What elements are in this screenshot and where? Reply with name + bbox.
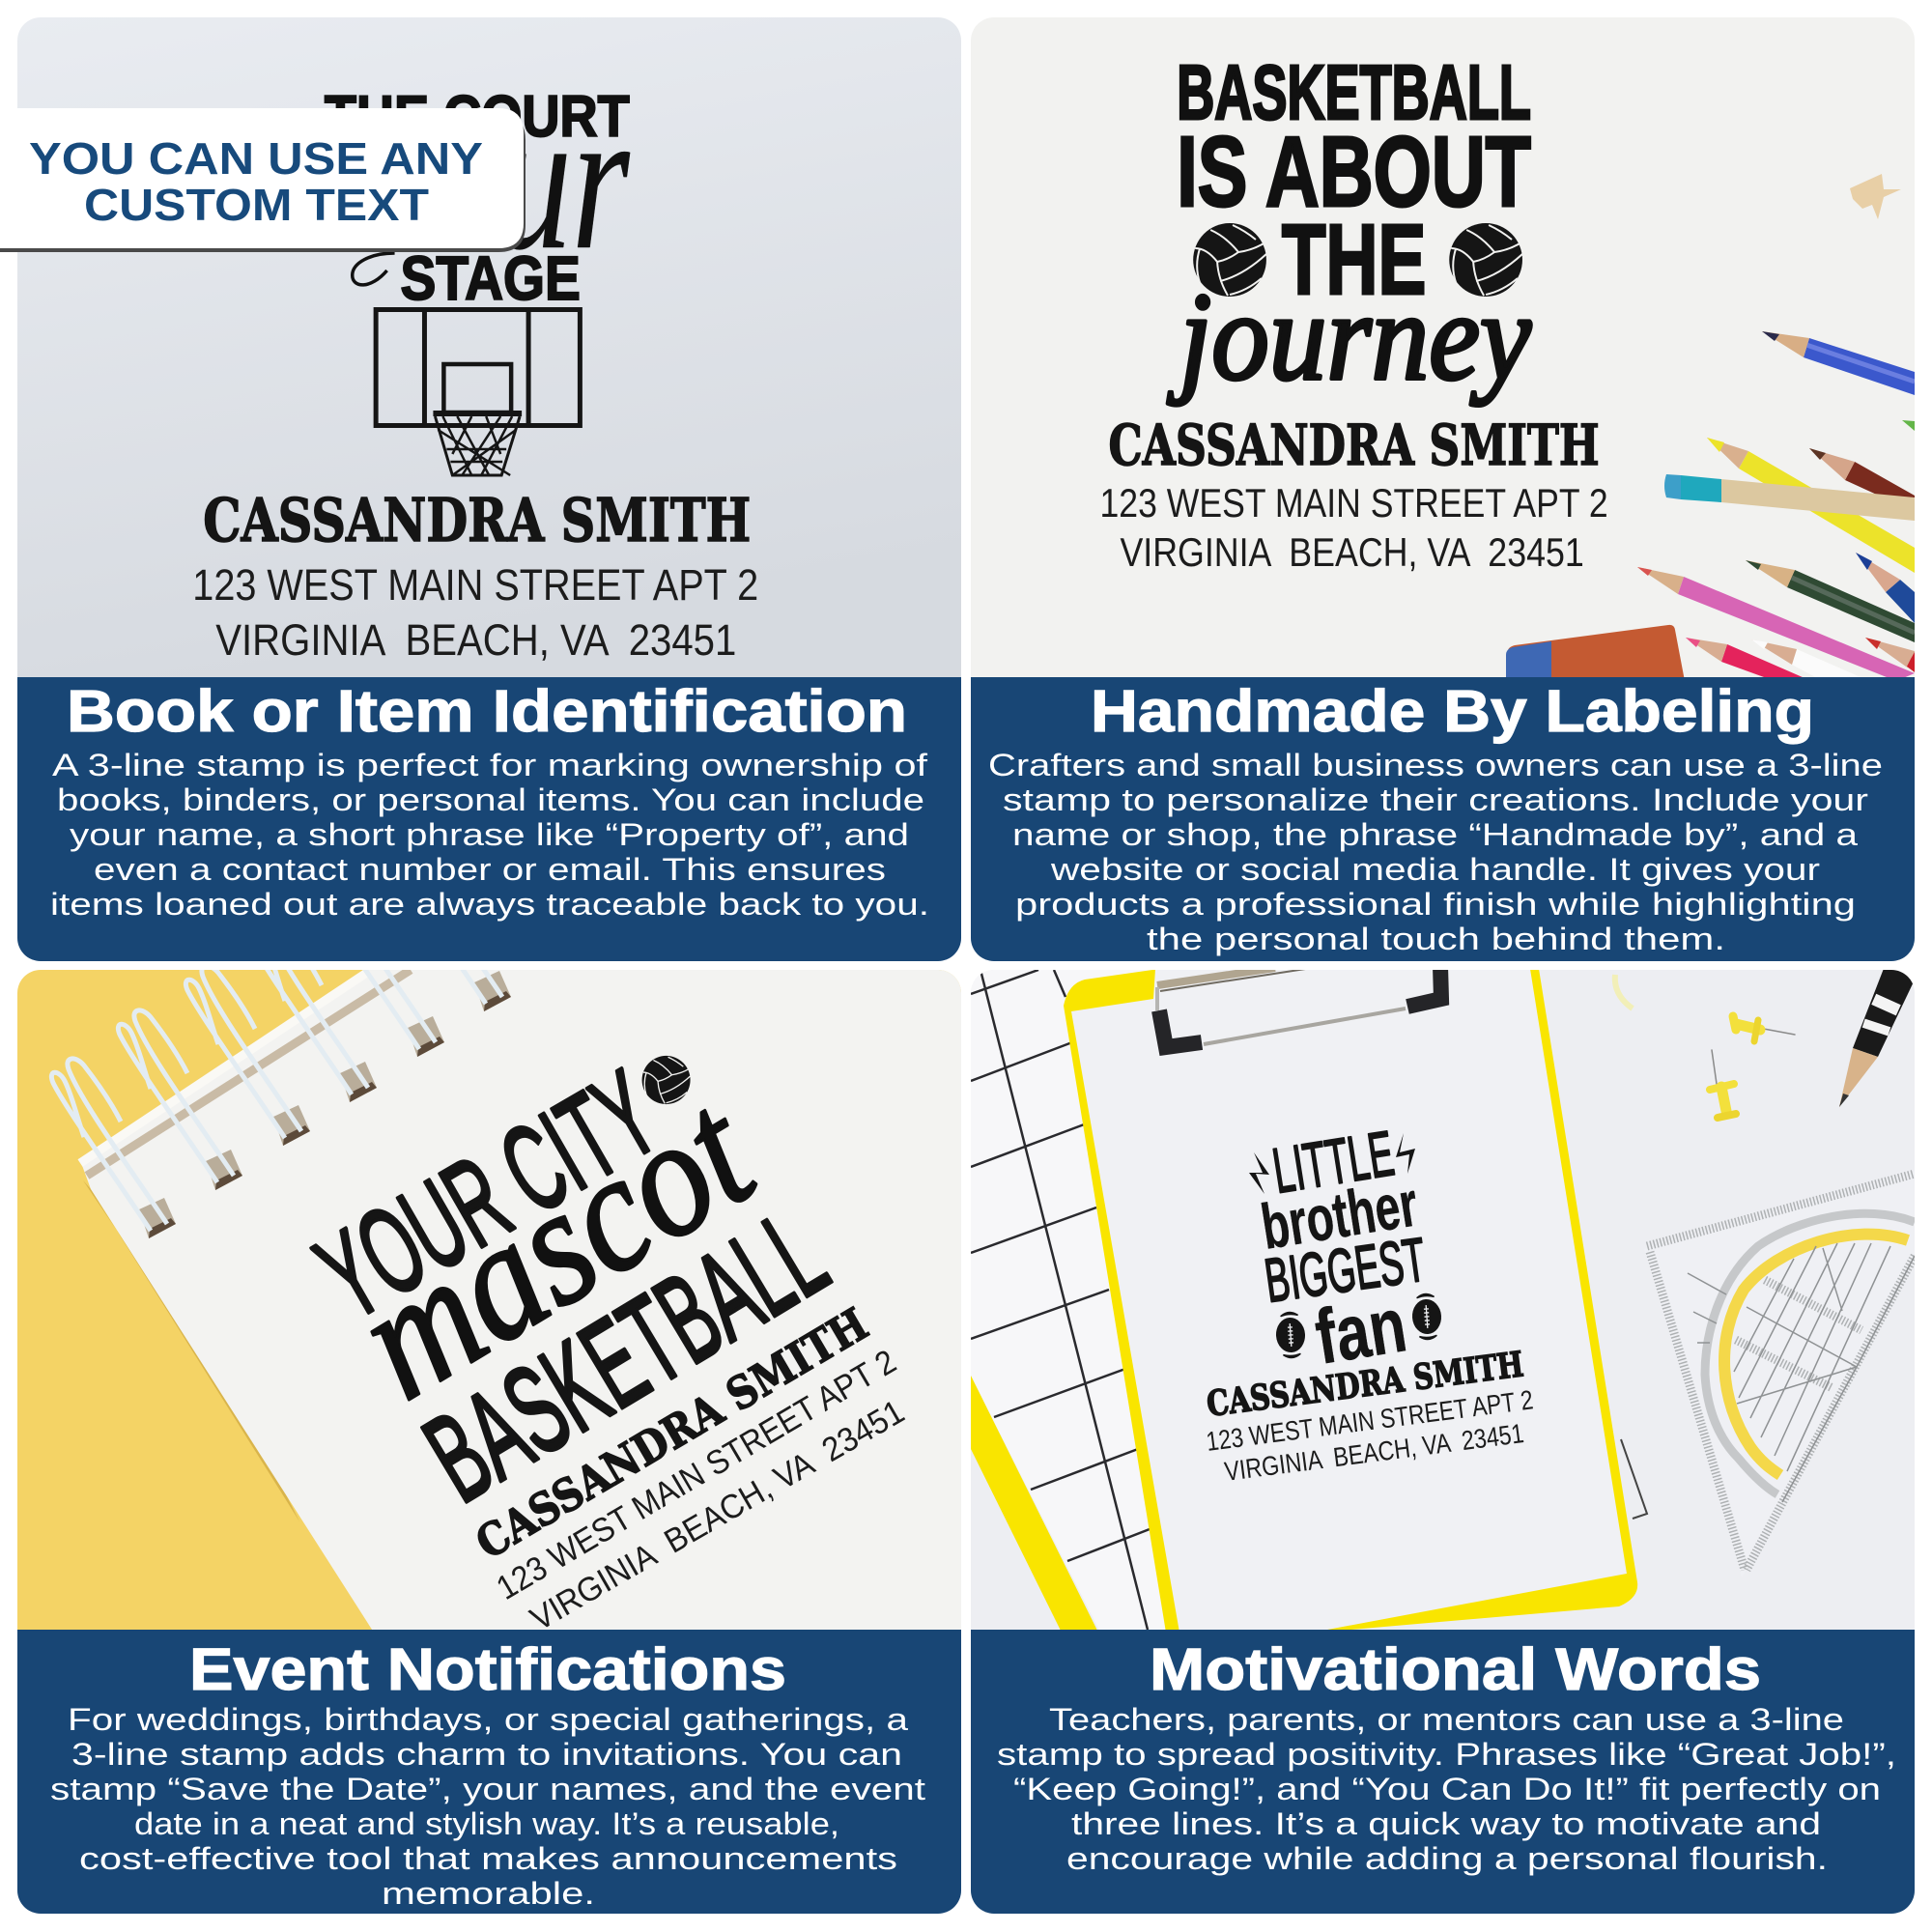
yellow background (17, 970, 961, 1636)
stamp address line 1: 123 WEST MAIN STREET APT 2 (490, 1343, 902, 1607)
clipboard paper (1071, 969, 1627, 1633)
stamp address line 2: VIRGINIA BEACH, VA 23451 (215, 615, 736, 665)
pushpin top (1733, 1016, 1795, 1041)
pencil: dark green (1746, 560, 1915, 642)
pencil: white (1751, 639, 1869, 681)
stamp name: CASSANDRA SMITH (467, 1297, 876, 1569)
caption text: website or social media handle. It gives your (1050, 852, 1820, 887)
panel: motivational words (971, 966, 1917, 1914)
caption text: date in a neat and stylish way. It’s a reusable, (134, 1806, 839, 1841)
eraser block (1506, 625, 1685, 681)
stamp address line 1: 123 WEST MAIN STREET APT 2 (192, 560, 758, 610)
ring 4 (252, 923, 377, 1102)
caption text: name or shop, the phrase “Handmade by”, and a (1012, 817, 1858, 852)
caption text: stamp to personalize their creations. Include your (1003, 782, 1868, 817)
stamp design: little brother biggest fan (1205, 1117, 1535, 1487)
pencil: pink (1637, 567, 1915, 681)
icon: lightning right (1396, 1133, 1415, 1174)
caption text: even a contact number or email. This ensures (94, 852, 886, 887)
panel: book or item identification (17, 17, 961, 961)
notebook shadow (83, 1180, 299, 1521)
caption text (50, 1702, 925, 1911)
caption text: Crafters and small business owners can use a 3-line (988, 748, 1883, 782)
stamp line: fan: fan (1310, 1281, 1412, 1380)
pencil (1839, 966, 1917, 1107)
stamp address line 2: VIRGINIA BEACH, VA 23451 (1120, 529, 1584, 575)
set square protractor (1644, 1171, 1915, 1577)
heading: Book or Item Identification (67, 678, 907, 744)
stamp address line 1: 123 WEST MAIN STREET APT 2 (1205, 1384, 1535, 1457)
caption text: “Keep Going!”, and “You Can Do It!” fit perfectly on (1013, 1772, 1881, 1806)
spiral rings (51, 832, 511, 1238)
stamp line: little: LITTLE (1268, 1117, 1399, 1207)
icon: volleyball left (1193, 223, 1266, 297)
icon: volleyball right (1449, 223, 1522, 297)
stamp design: the court is your stage (192, 68, 758, 665)
pencil: red (1686, 638, 1811, 681)
stamp name: CASSANDRA SMITH (203, 485, 751, 555)
panel: handmade by labeling (971, 17, 1915, 961)
stamp script: your: Your (355, 68, 631, 292)
heading: Event Notifications (189, 1636, 786, 1702)
panel: event notifications (17, 832, 961, 1914)
photo background (971, 17, 1915, 684)
pushpin lower (1710, 1050, 1736, 1118)
caption text (997, 1702, 1896, 1876)
stamp line: stage: STAGE (401, 243, 581, 313)
badge line 1: YOU CAN USE ANY (29, 133, 483, 184)
desk background (971, 970, 1915, 1636)
stamp line: basketball: BASKETBALL (403, 1183, 848, 1528)
caption text: For weddings, birthdays, or special gatherings, a (68, 1702, 908, 1737)
pencil: red right (1865, 638, 1915, 672)
notebook page (80, 970, 961, 1633)
rear clipboard edge (971, 1376, 1098, 1633)
badge shadow (0, 113, 526, 252)
sheet edge behind clipboard (1621, 1439, 1647, 1519)
ring 6 (386, 832, 511, 1011)
badge line 2: CUSTOM TEXT (84, 180, 429, 230)
caption text: cost-effective tool that makes announcements (79, 1841, 897, 1876)
stamp line: basketball: BASKETBALL (1177, 49, 1531, 135)
pencil: small blue (1856, 553, 1915, 623)
caption text: encourage while adding a personal flourish. (1066, 1841, 1828, 1876)
icon: football left (1274, 1312, 1307, 1358)
stamp line: brother: brother (1257, 1167, 1422, 1263)
caption text: books, binders, or personal items. You can include (57, 782, 924, 817)
icon: football right (1410, 1293, 1443, 1340)
caption text (988, 748, 1883, 956)
caption text: 3-line stamp adds charm to invitations. You can (71, 1737, 902, 1772)
pencil: yellow (1707, 438, 1915, 573)
caption text: the personal touch behind them. (1147, 922, 1725, 956)
metal clip (1157, 966, 1441, 1047)
caption text: items loaned out are always traceable back to you. (50, 887, 929, 922)
ring 3 (185, 966, 310, 1146)
caption text (50, 748, 929, 922)
stamp design: basketball is about the journey (1100, 49, 1608, 575)
stamp line: your city: YOUR CITY (296, 1044, 679, 1345)
ring 2 (118, 1010, 242, 1190)
script flourish (353, 253, 395, 285)
heading: Motivational Words (1150, 1636, 1761, 1702)
caption band (971, 677, 1915, 961)
caption text: three lines. It’s a quick way to motivate and (1071, 1806, 1821, 1841)
stamp name: CASSANDRA SMITH (1108, 412, 1600, 478)
caption text: memorable. (382, 1876, 595, 1911)
grid paper (971, 970, 1208, 1633)
stamp address line 1: 123 WEST MAIN STREET APT 2 (1100, 480, 1608, 526)
stamp line: is about: IS ABOUT (1177, 116, 1531, 227)
caption text: stamp to spread positivity. Phrases like “Great Job!”, (997, 1737, 1896, 1772)
stamp name: CASSANDRA SMITH (1205, 1344, 1525, 1425)
pencil: green (1902, 420, 1915, 431)
yellow curl (1615, 975, 1633, 1009)
caption band (17, 1630, 961, 1914)
pencil: blue (1762, 331, 1915, 395)
icon: lightning left (1249, 1152, 1269, 1194)
heading: Handmade By Labeling (1091, 678, 1814, 744)
caption text: A 3-line stamp is perfect for marking ownership of (52, 748, 927, 782)
coloured pencils (1637, 331, 1915, 681)
pencil: tan with eraser (1664, 474, 1915, 521)
stamp script: journey: journey (1167, 268, 1531, 407)
ring 1 (51, 1059, 176, 1238)
caption band (17, 677, 961, 961)
caption text: products a professional finish while highlighting (1015, 887, 1856, 922)
photo background (17, 17, 961, 684)
ring 5 (320, 877, 444, 1057)
caption text: your name, a short phrase like “Property of”, and (70, 817, 909, 852)
clipboard (1064, 969, 1637, 1633)
icon: pencil shaving (1850, 174, 1901, 219)
stamp address line 2: VIRGINIA BEACH, VA 23451 (1223, 1418, 1525, 1487)
icon: volleyball (642, 1056, 691, 1104)
caption band (971, 1630, 1915, 1914)
stamp line: the: THE (1282, 204, 1426, 315)
caption text: stamp “Save the Date”, your names, and the event (50, 1772, 925, 1806)
stamp line: the court: THE COURT (325, 84, 630, 149)
stamp line: biggest: BIGGEST (1261, 1224, 1430, 1316)
notebook binding (80, 970, 411, 1176)
stamp address line 2: VIRGINIA BEACH, VA 23451 (525, 1393, 911, 1638)
stamp design: your city mascot basketball (296, 1044, 911, 1638)
icon: basketball hoop (376, 309, 580, 475)
caption text: Teachers, parents, or mentors can use a 3-line (1049, 1702, 1844, 1737)
stamp script: mascot: mascot (327, 1056, 784, 1435)
pencil: brown (1809, 448, 1915, 512)
badge shape (0, 108, 524, 248)
callout badge (0, 108, 526, 252)
